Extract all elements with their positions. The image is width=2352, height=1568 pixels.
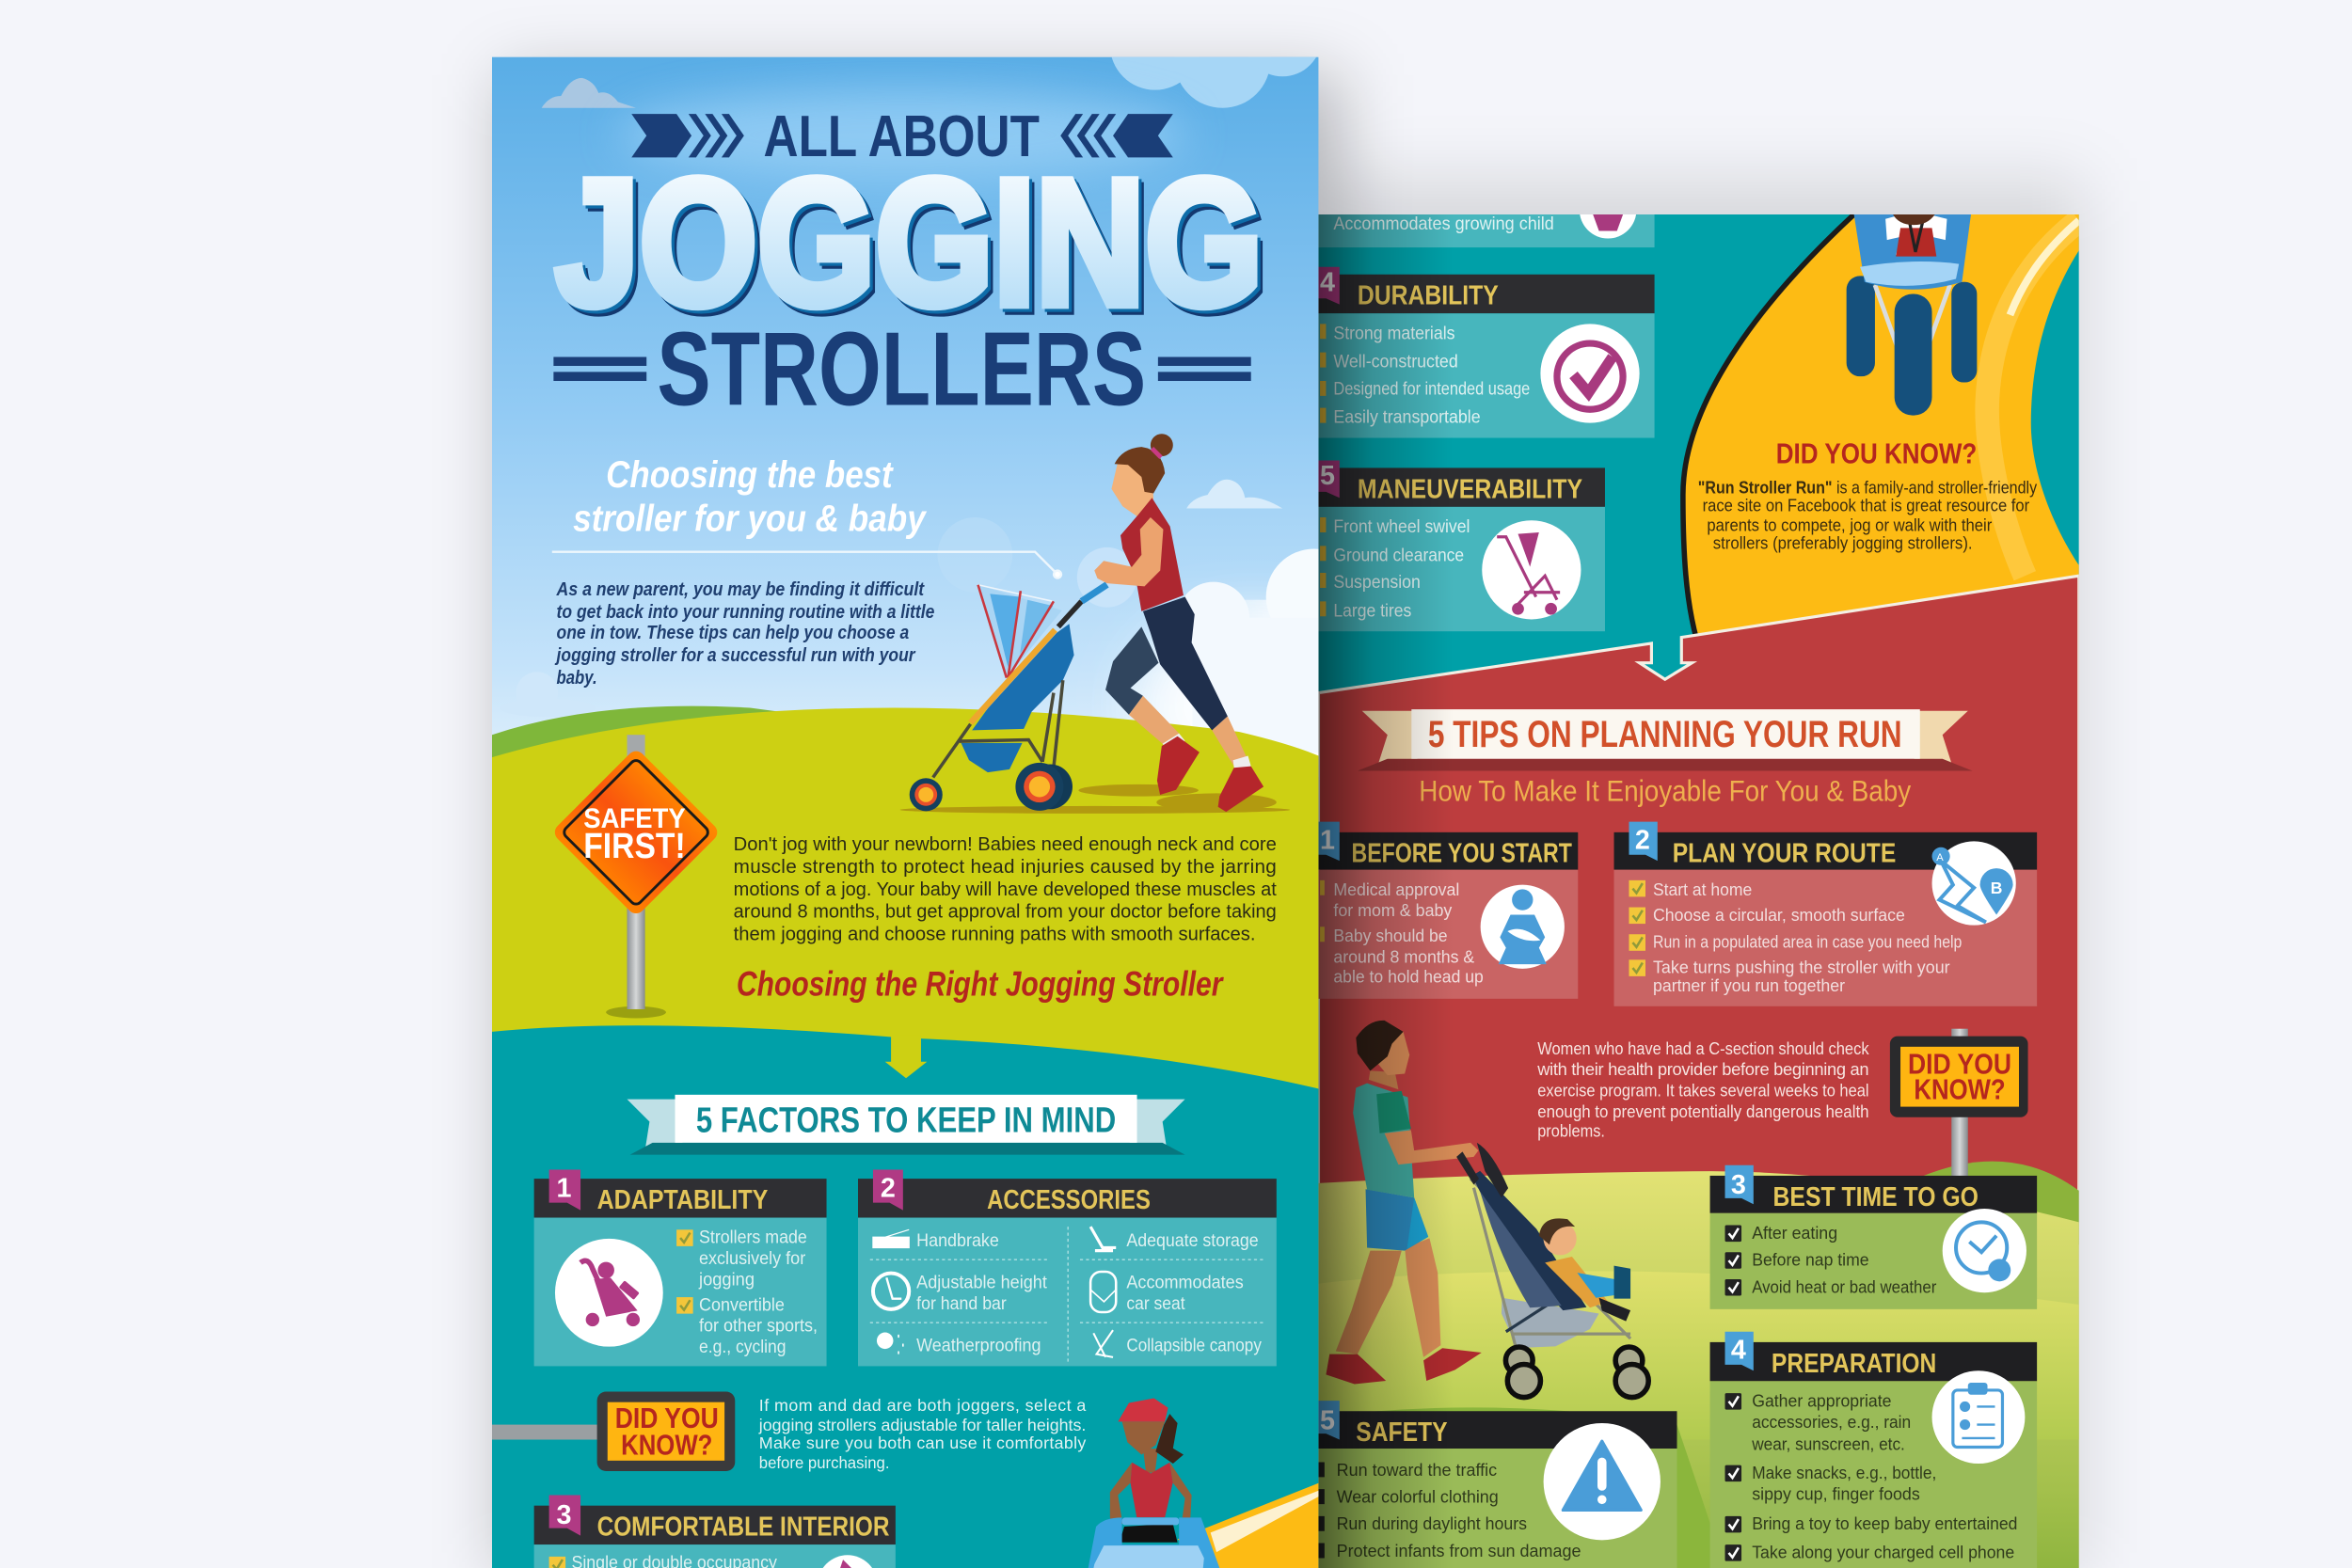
list: accessories, e.g., rain [1752,1412,1911,1432]
list: Start at home [1653,879,1752,899]
c-section text: Women who have had a C-section should check [1537,1038,1869,1058]
badge 1: 1 [557,1173,572,1203]
teal section background [492,1025,1318,1568]
heading: SAFETY [1356,1418,1448,1448]
list: Medical approval [1333,879,1459,899]
panel: 3 best time to go [1710,1165,2037,1309]
icon: check badge [1540,324,1640,423]
panel: left infographic sheet [492,0,1373,1568]
badge 3 [1725,1165,1754,1204]
list [1725,1223,1936,1296]
list: Convertible [699,1295,785,1315]
heading: DURABILITY [1358,281,1499,311]
icon: route map [1932,841,2016,926]
neck and face [1369,1070,1398,1089]
list [1318,1460,1581,1560]
body text [1698,478,2038,553]
right chevrons [1060,114,1173,157]
c-section text [1536,1038,1869,1140]
banner title: 5 FACTORS TO KEEP IN MIND [696,1101,1116,1141]
badge 2 [1629,822,1658,861]
safety paragraph [734,833,1277,945]
item: accommodates car seat: Accommodates [1126,1274,1244,1293]
list [676,1228,818,1357]
badge 5: 5 [1320,1405,1335,1435]
red section background [1318,576,2079,1568]
all about text: ALL ABOUT [764,104,1040,169]
intro text: to get back into your running routine with a little [557,601,934,623]
heading: BEFORE YOU START [1352,839,1572,869]
yellow road [1683,214,2079,639]
badge 3 [549,1496,580,1536]
subtitle: How To Make It Enjoyable For You & Baby [1419,773,1911,807]
heading: COMFORTABLE INTERIOR [597,1513,890,1543]
did you know callout: road [1698,439,2038,553]
body text: parents to compete, jog or walk with their [1707,515,1992,534]
list: jogging [698,1270,755,1290]
icon: stroller [555,1239,663,1347]
shadow cast by left sheet [1318,214,1454,1568]
badge 4: 4 [1731,1335,1746,1365]
did you know text [758,1396,1086,1472]
did you know sign: DID YOU [1908,1050,2011,1081]
item: accommodates car seat [1090,1272,1244,1314]
item: handbrake [873,1229,999,1251]
subtitle: Choosing the best [606,454,894,496]
shoes [1326,1354,1386,1385]
list: Run during daylight hours [1337,1513,1527,1533]
badge 1 [1318,822,1340,861]
heading: PLAN YOUR ROUTE [1673,839,1896,869]
list: able to hold head up [1333,966,1484,986]
list: Baby should be [1333,926,1448,945]
banner: 5 factors [627,1095,1185,1155]
c-section text: problems. [1537,1120,1605,1140]
illustration: mother with stroller from front [1089,1399,1220,1568]
list: Easily transportable [1333,408,1481,428]
item: collapsible canopy [1093,1330,1262,1357]
badge 3: 3 [557,1500,572,1530]
arm [1385,1130,1478,1164]
panel: 4 preparation [1710,1332,2037,1568]
panel: 1 before you start [1318,822,1578,999]
intro text [554,578,934,689]
list: Wear colorful clothing [1337,1486,1499,1506]
subtitle: stroller for you & baby [573,498,927,539]
item: adjustable height: for hand bar [916,1294,1007,1314]
list: Take turns pushing the stroller with your [1653,958,1950,977]
icon circle [818,1555,878,1568]
pointer line [552,552,1061,578]
banner: 5 tips [1358,709,1973,770]
safety first sign [551,735,721,1019]
back leg [1336,1251,1402,1354]
item: weatherproofing: Weatherproofing [916,1336,1041,1355]
runner [1094,434,1263,812]
top [1120,498,1184,611]
badge 4 [1725,1332,1754,1370]
list: Designed for intended usage [1333,379,1530,399]
list: Well-constructed [1333,353,1458,372]
badge 2: 2 [881,1173,896,1203]
panel: 5 maneuverability [1318,460,1605,631]
list: Front wheel swivel [1333,517,1470,537]
badge 5 [1318,1401,1340,1440]
list: Suspension [1333,573,1421,593]
title: all about [618,90,1188,180]
did you know text: before purchasing. [759,1453,889,1472]
body text: strollers (preferably jogging strollers). [1713,533,1973,553]
list [1629,879,1962,995]
stroller [910,584,1107,811]
panel: 3 comfortable interior [534,1496,896,1568]
illustration: runner with stroller [900,434,1290,814]
item: adequate storage: Adequate storage [1126,1231,1259,1251]
list: Strollers made [699,1228,807,1248]
list: sippy cup, finger foods [1752,1483,1920,1503]
panel: 5 safety [1318,1401,1677,1568]
badge 3: 3 [1731,1170,1746,1200]
badge 2: 2 [1635,825,1650,855]
c-section text: enough to prevent potentially dangerous health [1537,1101,1869,1121]
arrow [885,1035,927,1078]
list: Gather appropriate [1752,1390,1891,1410]
panel: 4 durability [1318,267,1655,438]
list: Take along your charged cell phone [1752,1542,2014,1561]
hair [1115,447,1165,494]
clouds [500,0,1373,795]
list: After eating [1752,1223,1837,1243]
list: Strong materials [1333,324,1455,343]
c-section text: exercise program. It takes several weeks to heal [1537,1080,1869,1100]
list: Bring a toy to keep baby entertained [1752,1513,2017,1533]
icon: warning triangle [1544,1423,1661,1540]
safety paragraph: motions of a jog. Your baby will have developed these muscles at [734,879,1277,900]
left chevrons [631,114,744,157]
intro text: jogging stroller for a successful run with your [554,644,915,666]
list: for mom & baby [1333,900,1453,920]
top view stroller and baby [1847,214,1977,416]
front leg [1405,1238,1440,1357]
safety paragraph: them jogging and choose running paths with smooth surfaces. [734,924,1255,945]
list: Protect infants from sun damage [1337,1541,1581,1560]
icon: stroller side [1482,520,1581,619]
list [1320,324,1530,428]
list: Ground clearance [1333,546,1464,565]
safety first sign: SAFETY [583,803,686,834]
c-section text: with their health provider before beginning an [1536,1059,1869,1079]
panel: 2 plan your route [1614,822,2037,1006]
arm [1094,517,1163,586]
did you know sign [492,1392,735,1471]
badge 2 [873,1170,903,1211]
shadow [900,784,1290,814]
icon: clipboard [1932,1370,2025,1464]
title: jogging: JOGGING [561,148,1268,349]
front leg [1212,716,1248,767]
list: wear, sunscreen, etc. [1751,1434,1905,1454]
neck and face [1111,457,1153,517]
subtitle [573,454,927,539]
list: Choose a circular, smooth surface [1653,905,1905,925]
list: Avoid heat or bad weather [1752,1276,1936,1296]
road [1178,1483,1318,1568]
safety paragraph: muscle strength to protect head injuries caused by the jarring [734,856,1277,878]
list: Make snacks, e.g., bottle, [1752,1463,1936,1482]
list item: Accommodates growing child [1333,214,1554,234]
safety paragraph: Don't jog with your newborn! Babies need enough neck and core [734,833,1277,855]
did you know text: Make sure you both can use it comfortably [759,1433,1086,1452]
heading: ACCESSORIES [987,1185,1151,1215]
hills [1318,1162,2079,1568]
list [1320,879,1484,986]
badge 1: 1 [1320,825,1335,855]
panel: 1 adaptability [534,1170,827,1366]
did you know sign: DID YOU [615,1403,719,1434]
list: around 8 months & [1333,947,1474,967]
badge 4 [1318,267,1340,305]
item: handbrake: Handbrake [916,1231,999,1251]
badge 4: 4 [1320,267,1335,297]
did you know text: jogging strollers adjustable for taller heights. [758,1416,1086,1434]
title: jogging: JOGGING [558,145,1266,346]
panel: accommodates growing child [1319,214,1655,247]
banner title: 5 TIPS ON PLANNING YOUR RUN [1428,714,1902,755]
item: collapsible canopy: Collapsible canopy [1126,1336,1262,1355]
did you know callout: road: DID YOU KNOW? [1776,439,1977,470]
panel: 2 accessories [858,1170,1277,1366]
badge 5 [1318,460,1340,498]
item: accommodates car seat: car seat [1126,1294,1185,1314]
shorts [1366,1189,1428,1251]
list [1320,517,1470,621]
did you know sign: KNOW? [621,1430,712,1461]
baby in stroller [1539,1218,1630,1322]
body text: race site on Facebook that is great resource for [1703,496,2029,515]
heading: ADAPTABILITY [597,1185,768,1215]
title: jogging: JOGGING [555,142,1263,343]
panel shadows [502,75,2085,1568]
item: adjustable height: Adjustable height [916,1274,1048,1293]
intro text: one in tow. These tips can help you choose a [557,622,909,643]
heading: MANEUVERABILITY [1358,474,1582,504]
section heading: Choosing the Right Jogging Stroller [737,965,1224,1004]
did you know text: If mom and dad are both joggers, select a [759,1396,1086,1415]
list: e.g., cycling [699,1338,786,1357]
list: Run in a populated area in case you need help [1653,932,1962,952]
list: exclusively for [699,1249,806,1269]
did you know sign [1890,1029,2028,1186]
title: strollers: STROLLERS [657,309,1146,427]
icon: route map: A [1936,852,1944,863]
list: Before nap time [1752,1250,1869,1270]
item: adjustable height [873,1274,1048,1314]
icon: clock [1943,1209,2026,1292]
list [1725,1390,2017,1561]
back leg [1105,626,1159,715]
did you know sign: KNOW? [1914,1075,2006,1106]
list: Run toward the traffic [1337,1460,1497,1480]
icon: route map: B [1991,879,2002,897]
panel: right infographic sheet [1318,182,2079,1568]
item: adequate storage [1090,1227,1259,1251]
heading: PREPARATION [1772,1349,1936,1379]
safety first sign: FIRST! [583,826,686,866]
t-shirt [1353,1084,1414,1197]
list: partner if you run together [1653,975,1845,995]
badge 5: 5 [1320,461,1335,491]
ground [492,706,1318,1095]
safety paragraph: around 8 months, but get approval from your doctor before taking [734,901,1277,923]
icon: mother and baby [1481,885,1565,969]
hair [1356,1021,1404,1070]
illustration: father pushing stroller [1326,1021,1648,1398]
body text: "Run Stroller Run" is a family-and stroller-friendly [1698,478,2038,498]
intro text: As a new parent, you may be finding it difficult [556,578,925,600]
item: weatherproofing [877,1333,1041,1355]
heading: BEST TIME TO GO [1773,1182,1979,1212]
list: Large tires [1333,601,1411,621]
list: for other sports, [699,1317,818,1337]
badge 1 [549,1170,580,1211]
stroller frame [1456,1143,1648,1398]
intro text: baby. [557,667,597,689]
